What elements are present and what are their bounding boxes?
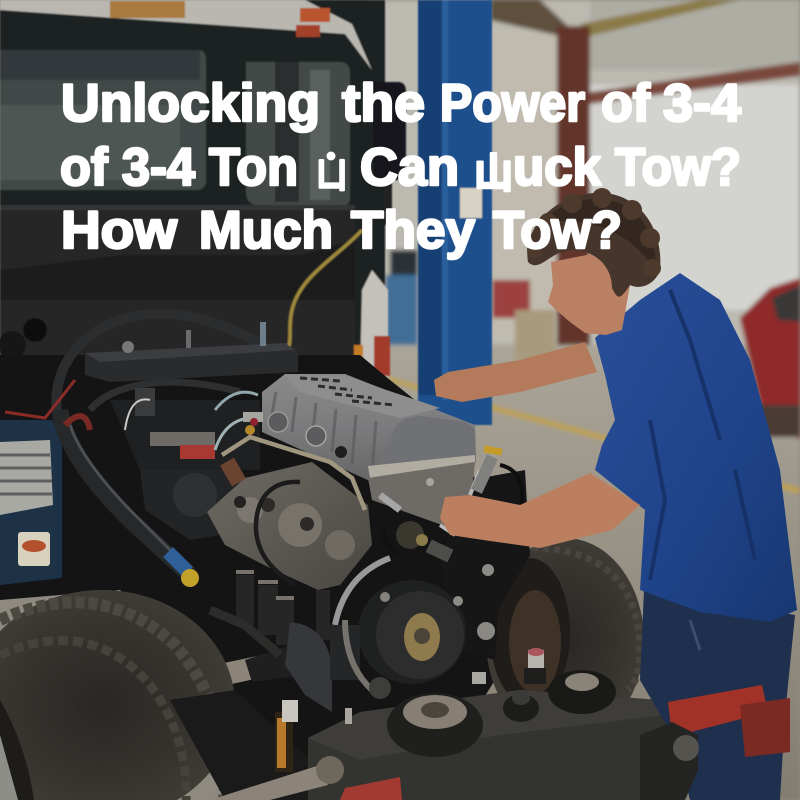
background equipment [385, 250, 555, 360]
man: left arm reaching to valve cover [434, 342, 597, 402]
main hose [60, 410, 190, 575]
shirt fold shadows [650, 290, 755, 580]
black bracket plate [440, 470, 530, 660]
left vent holes [23, 318, 47, 342]
title: Much [199, 201, 333, 260]
lower left pipe [210, 765, 328, 800]
title: of [601, 74, 650, 133]
front left tire [0, 590, 235, 800]
mid engine accessories [110, 400, 260, 470]
title: Can [360, 138, 459, 197]
title: 凵 [317, 157, 346, 195]
flywheel pulley [358, 580, 495, 684]
block hose [256, 482, 300, 585]
windshield left [0, 50, 206, 190]
chrome trim [368, 455, 475, 478]
man: jeans [640, 590, 795, 800]
man: right arm and hand [440, 473, 640, 548]
yellow floor line [385, 376, 800, 494]
title: the [342, 74, 425, 133]
platform small dial [548, 670, 616, 714]
man: blue shirt [595, 273, 797, 622]
lower cab panel [0, 205, 355, 360]
engine lower block [207, 462, 372, 645]
black hose loop [56, 314, 262, 420]
red car [740, 278, 800, 440]
red marker stripe [275, 712, 293, 772]
platform dial [387, 693, 483, 757]
bottom platform [210, 648, 672, 800]
title: Power [440, 74, 585, 133]
title: 3-4 [663, 74, 742, 133]
mirror [372, 82, 406, 180]
title: How [61, 201, 178, 260]
title: Tow? [493, 201, 622, 260]
title: They [351, 201, 476, 260]
red base plate [340, 777, 402, 800]
title: Unlocking [61, 74, 320, 133]
workshop background [370, 0, 800, 800]
chassis dark gap [170, 690, 310, 800]
title: Tow? [615, 138, 741, 197]
engine bay [0, 314, 520, 760]
man: head [527, 188, 661, 335]
title: of 3-4 Ton [60, 138, 298, 197]
left blue box [0, 420, 62, 585]
cab roof [0, 0, 372, 70]
ribbed intake pipes [236, 575, 330, 645]
brass fuel line [222, 437, 365, 510]
axle and hub [200, 610, 391, 712]
right rear tire [486, 538, 644, 742]
title: uck [513, 138, 602, 197]
truck cab [0, 0, 406, 400]
lift column [418, 0, 492, 425]
knob [503, 694, 539, 722]
small fittings and wires [215, 412, 522, 625]
windshield right [246, 62, 350, 206]
valve cover [262, 374, 476, 525]
floor [380, 345, 800, 800]
title: 山 [474, 152, 513, 196]
red crossbar [640, 685, 790, 800]
cab side post [360, 270, 388, 380]
title [60, 74, 742, 260]
yellow cable [288, 230, 362, 348]
gauges [268, 412, 288, 432]
top control box [85, 345, 298, 382]
